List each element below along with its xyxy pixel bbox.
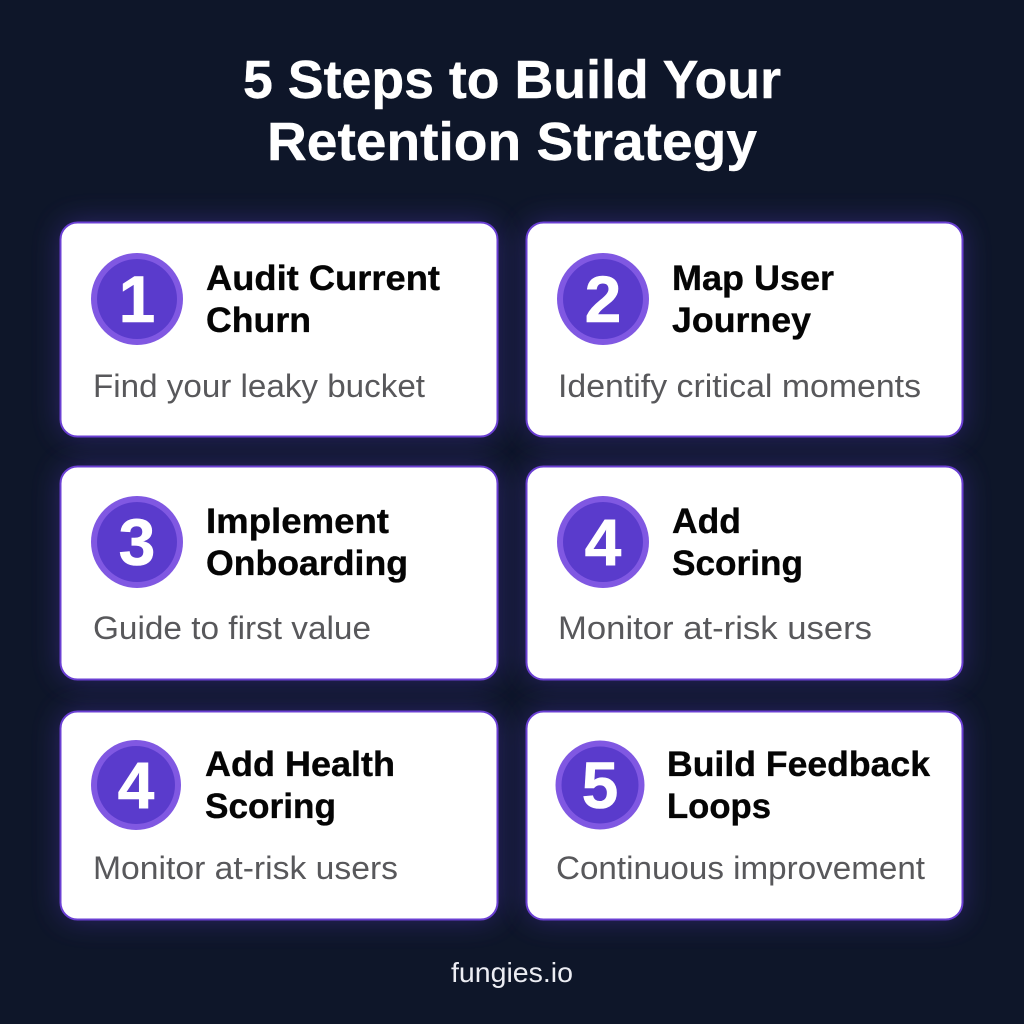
- description: continuous improvement: Continuous improvement: [556, 850, 925, 886]
- description: guide to first value: Guide to first value: [93, 610, 371, 646]
- title: [243, 50, 781, 172]
- icon: number badge 5: 5: [582, 748, 618, 822]
- icon: number badge 2: 2: [585, 262, 621, 336]
- icon: number badge 3: [91, 496, 183, 588]
- footer: brand name: fungies.io: [451, 957, 573, 988]
- heading: build feedback loops: Build Feedback: [667, 745, 931, 784]
- heading: add health scoring: [205, 745, 395, 826]
- heading: implement onboarding: Implement: [206, 502, 389, 541]
- panel: step 2 map user journey: [526, 222, 963, 437]
- heading: implement onboarding: [206, 502, 408, 583]
- heading: audit current churn: Churn: [206, 301, 311, 340]
- panel: step 3 implement onboarding: [60, 466, 498, 680]
- description: monitor at-risk users: Monitor at-risk users: [558, 610, 872, 646]
- panel: step 4 add health scoring: [60, 711, 498, 920]
- panel: step 5 build feedback loops: [526, 711, 963, 920]
- icon: number badge 1: [91, 253, 183, 345]
- icon: number badge 4: 4: [585, 505, 622, 579]
- heading: audit current churn: Audit Current: [206, 259, 440, 298]
- heading: audit current churn: [206, 259, 440, 340]
- heading: map user journey: Map User: [672, 259, 834, 298]
- icon: number badge 5: [556, 740, 644, 830]
- heading: add scoring: Scoring: [672, 544, 803, 583]
- description: identify critical moments: Identify critical moments: [558, 368, 921, 404]
- heading: build feedback loops: [667, 745, 931, 826]
- heading: add scoring: [672, 502, 803, 583]
- panel: step 1 audit current churn: [60, 222, 498, 437]
- icon: number badge 4: [557, 496, 649, 588]
- heading: map user journey: [672, 259, 834, 340]
- heading: map user journey: Journey: [672, 301, 812, 340]
- description: find your leaky bucket: Find your leaky bucket: [93, 368, 425, 404]
- icon: number badge 4: [91, 740, 181, 830]
- heading: build feedback loops: Loops: [667, 787, 771, 826]
- icon: number badge 3: 3: [119, 505, 155, 579]
- icon: number badge 2: [557, 253, 649, 345]
- heading: implement onboarding: Onboarding: [206, 544, 408, 583]
- title: 5 Steps to Build Your: [243, 50, 781, 110]
- icon: number badge 4: 4: [118, 748, 155, 822]
- description: monitor at-risk users: Monitor at-risk users: [93, 850, 398, 886]
- panel: step 4 add scoring: [526, 466, 963, 680]
- icon: number badge 1: 1: [119, 262, 155, 336]
- title: Retention Strategy: [267, 112, 757, 172]
- heading: add health scoring: Scoring: [205, 787, 336, 826]
- heading: add scoring: Add: [672, 502, 741, 541]
- heading: add health scoring: Add Health: [205, 745, 395, 784]
